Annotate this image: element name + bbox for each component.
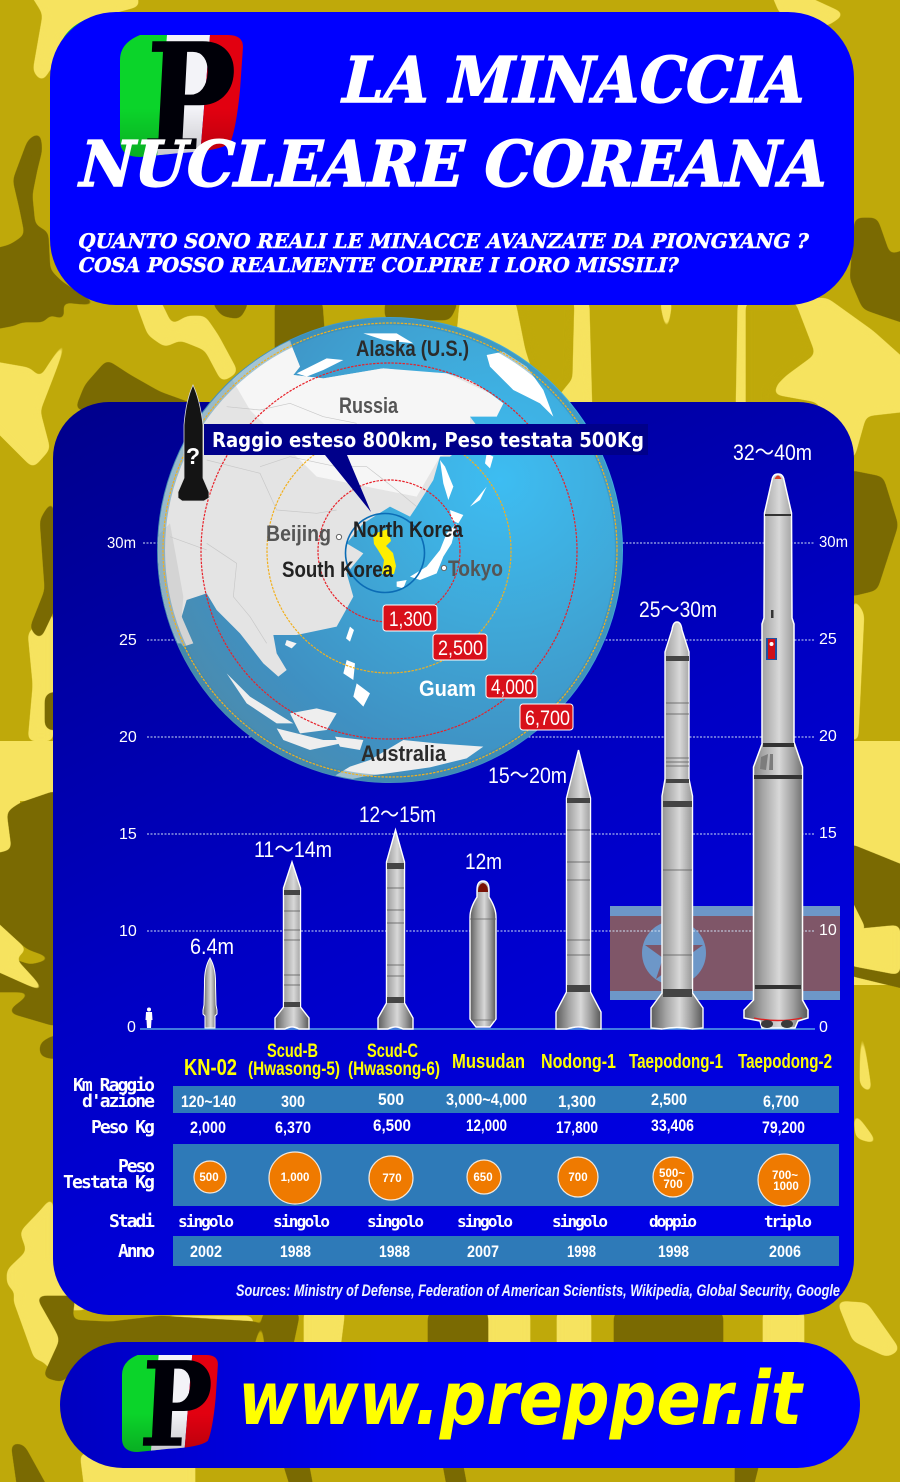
right height axis: 0 xyxy=(819,1019,828,1036)
title xyxy=(71,44,837,202)
main panel xyxy=(53,402,854,1315)
title: NUCLEARE COREANA xyxy=(71,128,837,202)
year row xyxy=(190,1243,801,1261)
missile names: Taepodong-1 xyxy=(629,1051,723,1073)
range tags: 6,700 xyxy=(525,707,570,730)
left height axis: 20 xyxy=(119,729,137,746)
right height axis: 15 xyxy=(819,825,837,842)
title: LA MINACCIA xyxy=(334,44,815,118)
missile height labels: 25〜30m xyxy=(639,597,717,622)
warhead weight circles: 770 xyxy=(382,1173,402,1185)
warhead weight circles: 1000 xyxy=(773,1181,799,1193)
range values: 300 xyxy=(281,1093,305,1111)
year row: 2007 xyxy=(467,1243,499,1261)
stages row: singolo xyxy=(552,1212,608,1231)
stages row: singolo xyxy=(178,1212,234,1231)
stages row: singolo xyxy=(273,1212,330,1231)
stages row: doppio xyxy=(649,1212,697,1231)
weight values: 79,200 xyxy=(762,1119,805,1137)
warhead weight circles: 650 xyxy=(473,1172,493,1184)
website address: www.prepper.it xyxy=(238,1356,804,1442)
missile height labels: 15〜20m xyxy=(488,763,567,788)
country labels: Australia xyxy=(361,741,447,766)
weight values: 6,500 xyxy=(373,1117,411,1135)
range values: 500 xyxy=(378,1091,404,1109)
stages row: singolo xyxy=(457,1212,513,1231)
row labels: Testata Kg xyxy=(63,1172,155,1193)
rocket: Taepodong-1 xyxy=(651,622,703,1029)
weight values: 12,000 xyxy=(466,1117,507,1135)
stages row: singolo xyxy=(367,1212,424,1231)
missile height labels: 32〜40m xyxy=(733,440,812,465)
right height axis: 20 xyxy=(819,728,837,745)
left height axis: 10 xyxy=(119,923,137,940)
icon: unknown missile xyxy=(178,385,209,501)
korea highlight xyxy=(373,529,396,574)
light seam area xyxy=(0,741,53,801)
missile height labels xyxy=(190,440,812,959)
year row: 1988 xyxy=(379,1243,410,1261)
header panel xyxy=(50,12,854,305)
range values: 6,700 xyxy=(763,1093,799,1111)
right height axis: 30m xyxy=(819,534,848,551)
callout: extended range: Raggio esteso 800km, Peso testata 500Kg xyxy=(212,428,644,452)
year row: 1998 xyxy=(658,1243,689,1261)
footer logo xyxy=(122,1355,218,1452)
missile names: Scud-B xyxy=(267,1041,318,1062)
year row: 2006 xyxy=(769,1243,801,1261)
stages row xyxy=(178,1212,812,1231)
row labels: Peso Kg xyxy=(91,1117,155,1138)
callout: extended range xyxy=(204,424,648,512)
globe map with missile ranges xyxy=(150,310,623,787)
missile height labels: 12m xyxy=(465,849,502,874)
range values: 120~140 xyxy=(181,1093,236,1111)
height grid lines xyxy=(143,543,815,931)
rocket: Nodong-1 xyxy=(556,750,601,1029)
missile names: Scud-C xyxy=(367,1041,418,1062)
missile height labels: 11〜14m xyxy=(254,837,332,862)
range rings xyxy=(163,323,617,777)
row labels xyxy=(63,1075,155,1262)
country labels: Alaska (U.S.) xyxy=(356,336,469,361)
rocket: Scud-B xyxy=(275,862,309,1029)
right height axis xyxy=(819,534,848,1036)
missile height labels: 12〜15m xyxy=(359,802,436,827)
icon: unknown missile: ? xyxy=(186,443,200,469)
left height axis: 0 xyxy=(127,1019,136,1036)
warhead weight circles: 700 xyxy=(663,1179,683,1191)
warhead weight circles: 500~ xyxy=(659,1168,685,1180)
rocket: Musudan xyxy=(470,881,496,1027)
subtitle xyxy=(76,229,811,277)
rocket: Scud-C xyxy=(378,830,413,1029)
table row bands xyxy=(173,1086,839,1266)
subtitle: QUANTO SONO REALI LE MINACCE AVANZATE DA PIONGYANG ? xyxy=(76,229,811,253)
range tags: 4,000 xyxy=(491,676,534,699)
warhead weight circles: 700 xyxy=(568,1172,588,1184)
left height axis: 25 xyxy=(119,632,137,649)
warhead weight circles: 700~ xyxy=(772,1170,798,1182)
weight values xyxy=(190,1117,805,1137)
warhead weight circles xyxy=(194,1152,810,1206)
missile names: Musudan xyxy=(452,1051,525,1073)
country labels: Guam xyxy=(419,676,476,701)
missile names: (Hwasong-5) xyxy=(248,1059,340,1080)
globe rim shading xyxy=(161,321,619,779)
range values xyxy=(181,1091,799,1111)
missile names: (Hwasong-6) xyxy=(348,1059,440,1080)
weight values: 17,800 xyxy=(556,1119,598,1137)
country labels: Russia xyxy=(339,393,399,418)
missile names: Nodong-1 xyxy=(541,1051,616,1073)
range values: 1,300 xyxy=(558,1093,596,1111)
range values: 3,000~4,000 xyxy=(446,1091,527,1109)
borders xyxy=(170,403,417,643)
weight values: 2,000 xyxy=(190,1119,226,1137)
country labels: Beijing xyxy=(266,521,331,546)
logo: italian flag P xyxy=(120,35,243,157)
row labels: d'azione xyxy=(82,1091,155,1112)
year row: 1988 xyxy=(280,1243,311,1261)
footer pill xyxy=(60,1337,860,1472)
land masses xyxy=(150,310,553,787)
range tags: 2,500 xyxy=(438,637,483,660)
row labels: Km Raggio xyxy=(73,1075,155,1096)
stages row: triplo xyxy=(764,1212,812,1231)
weight values: 6,370 xyxy=(275,1119,311,1137)
country labels: Tokyo xyxy=(448,556,503,581)
subtitle: COSA POSSO REALMENTE COLPIRE I LORO MISSILI? xyxy=(76,253,681,277)
warhead weight circles: 1,000 xyxy=(281,1172,309,1184)
row labels: Stadi xyxy=(109,1211,155,1232)
year row: 2002 xyxy=(190,1243,222,1261)
footer logo: P xyxy=(138,1337,215,1472)
left height axis: 30m xyxy=(107,535,136,552)
row labels: Anno xyxy=(118,1241,155,1262)
target circle xyxy=(346,514,424,592)
weight values: 33,406 xyxy=(651,1117,694,1135)
row labels: Peso xyxy=(118,1156,155,1177)
country labels: South Korea xyxy=(282,557,394,582)
missile names: KN-02 xyxy=(184,1054,237,1080)
warhead weight circles: 500 xyxy=(199,1172,219,1184)
north korean flag backdrop xyxy=(610,906,840,1000)
country labels: North Korea xyxy=(353,517,464,542)
country labels xyxy=(266,336,503,766)
range tags xyxy=(383,605,573,730)
rocket: KN-02 xyxy=(203,958,217,1028)
year row: 1998 xyxy=(567,1243,596,1261)
logo: italian flag P: P xyxy=(140,13,239,183)
right height axis: 25 xyxy=(819,631,837,648)
range tags: 1,300 xyxy=(389,608,432,631)
icon: human scale xyxy=(146,1008,152,1028)
left height axis xyxy=(107,535,137,1036)
right height axis: 10 xyxy=(819,922,837,939)
missile names: Taepodong-2 xyxy=(738,1051,832,1073)
city markers xyxy=(336,534,342,540)
left height axis: 15 xyxy=(119,826,137,843)
missile height labels: 6.4m xyxy=(190,934,234,959)
rocket: Taepodong-2 xyxy=(744,474,808,1028)
missile names xyxy=(184,1041,832,1080)
range values: 2,500 xyxy=(651,1091,687,1109)
